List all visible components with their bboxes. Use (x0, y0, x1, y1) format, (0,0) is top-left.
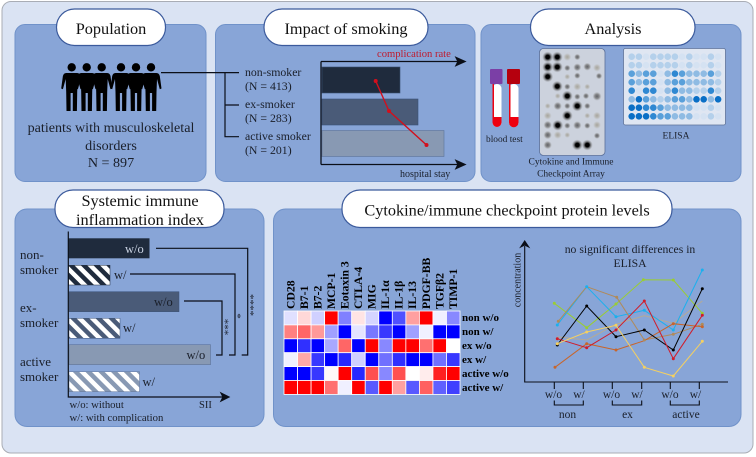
ELISA plate (624, 48, 726, 125)
smoker group labels: (N = 283) (245, 111, 292, 125)
heatmap grid (284, 311, 460, 394)
heatmap row labels: ex w/o (462, 340, 492, 352)
heading: analysis: Analysis (585, 19, 641, 38)
heatmap protein labels: Eotaxin 3 (338, 261, 352, 309)
heatmap protein labels: MIG (366, 284, 378, 309)
significance stars: * (235, 313, 247, 319)
heatmap protein labels: TIMP-1 (447, 269, 460, 309)
smoker group labels: smoker (20, 315, 59, 330)
significance stars: **** (248, 294, 260, 316)
heading: systemic immune inflammation index (55, 190, 224, 229)
heatmap protein labels: CD28 (284, 280, 298, 309)
population description: disorders (85, 138, 137, 154)
heatmap protein labels: CTLA-4 (352, 267, 365, 309)
heading: population: Population (76, 19, 146, 38)
smoker group labels: active smoker (245, 129, 311, 143)
heatmap protein labels: PDGF-BB (420, 258, 433, 309)
heading: systemic immune inflammation index: inflammation index (76, 210, 204, 229)
axis label: complication rate: complication rate (377, 49, 451, 60)
heatmap protein labels: IL-1β (392, 281, 406, 309)
heatmap protein labels: TGFβ2 (434, 273, 446, 309)
heatmap protein labels: IL-13 (406, 281, 419, 309)
significance stars: *** (222, 319, 234, 335)
smoker group labels: smoker (20, 369, 59, 384)
icon: blood tubes (490, 69, 520, 127)
label: ELISA: ELISA (663, 132, 690, 142)
panel: systemic immune inflammation index (15, 190, 264, 426)
heatmap row labels: non w/ (462, 326, 494, 338)
x axis labels: w/o (661, 389, 679, 401)
panel: analysis (481, 9, 741, 182)
heading: cytokine immune checkpoint protein levels: Cytokine/immune checkpoint protein levels (364, 200, 650, 220)
bar: non-smoker with complication (68, 265, 127, 285)
bar: ex-smoker without complication: w/o (154, 295, 173, 309)
red complication rate line (374, 79, 428, 147)
bar: non-smoker without complication: w/o (125, 242, 144, 256)
y axis label: concentration (512, 253, 524, 307)
label: cytokine and immune checkpoint array: Cytokine and Immune (529, 158, 613, 168)
bar: active smoker hospital stay (322, 130, 444, 156)
smoker group labels: active (20, 354, 51, 369)
bar: ex-smoker with complication: w/ (123, 321, 136, 335)
x axis labels: w/o (545, 389, 562, 401)
chart note: no significant differences in (565, 243, 695, 256)
bar: active smoker with complication: w/ (142, 375, 156, 389)
heading: analysis (530, 9, 695, 46)
axis label: SII: SII (199, 400, 212, 411)
chart axes and ticks (521, 241, 728, 405)
line chart: ELISA concentrations (512, 241, 728, 421)
population description: patients with musculoskeletal (28, 120, 194, 136)
bar: active smoker without complication: w/o (186, 348, 205, 362)
chart axes (321, 58, 465, 168)
heatmap protein labels: IL-1α (379, 280, 392, 309)
smoker group labels: non-smoker (245, 65, 301, 79)
heatmap protein labels: MCP-1 (325, 272, 338, 309)
heading: impact of smoking: Impact of smoking (284, 19, 408, 38)
heatmap protein labels: B7-2 (312, 285, 324, 309)
cytokine array membrane (540, 48, 605, 156)
connector tree from population to groups (161, 73, 239, 137)
series lines (553, 268, 704, 378)
panel: impact of smoking (216, 9, 475, 182)
heading: systemic immune inflammation index: Systemic immune (81, 191, 199, 210)
chart note: ELISA (613, 257, 647, 270)
smoker group labels: smoker (20, 262, 59, 277)
heading: cytokine immune checkpoint protein levels (342, 190, 672, 228)
significance stars (222, 294, 260, 335)
legend note: w/o: without (70, 399, 124, 411)
heatmap protein labels: B7-1 (298, 285, 311, 309)
bar: non-smoker with complication: w/ (114, 268, 127, 282)
smoker group labels: (N = 413) (245, 79, 292, 93)
x axis labels: w/ (690, 389, 702, 401)
smoker group labels: non- (20, 247, 44, 262)
axis label: hospital stay: hospital stay (400, 169, 450, 180)
significance brackets (130, 248, 248, 355)
bar: ex-smoker hospital stay (322, 99, 418, 125)
population description: N = 897 (88, 155, 134, 171)
label: cytokine and immune checkpoint array: Checkpoint Array (537, 170, 605, 180)
smoker group labels: (N = 201) (245, 143, 292, 157)
bar: ex-smoker with complication (69, 318, 136, 338)
bar: active smoker without complication (69, 345, 210, 365)
axes (68, 232, 229, 401)
x axis labels: w/ (631, 389, 644, 401)
bar: non-smoker hospital stay (322, 67, 400, 93)
heading: impact of smoking (264, 9, 428, 46)
bar: ex-smoker without complication (69, 292, 179, 312)
x axis labels: non (559, 409, 576, 421)
x axis labels: active (672, 409, 700, 421)
bar: active smoker with complication (69, 372, 156, 392)
panel: cytokine and immune checkpoint protein levels (274, 190, 741, 426)
heatmap row labels: non w/o (462, 312, 499, 324)
heatmap row labels: ex w/ (462, 354, 487, 366)
heading: population (56, 9, 166, 46)
panel: population (15, 9, 206, 182)
bar: non-smoker without complication (68, 238, 150, 258)
heatmap protein labels (284, 258, 460, 309)
x axis labels: w/ (573, 389, 586, 401)
label: blood test: blood test (486, 135, 523, 145)
heatmap row labels: active w/o (462, 368, 509, 380)
x axis labels: ex (622, 409, 633, 421)
legend note: w/: with complication (70, 412, 164, 424)
smoker group labels: ex-smoker (245, 97, 295, 111)
icon: group of people (61, 63, 162, 111)
heatmap row labels: active w/ (462, 382, 504, 394)
smoker group labels: ex- (20, 300, 37, 315)
x axis labels: w/o (603, 389, 620, 401)
